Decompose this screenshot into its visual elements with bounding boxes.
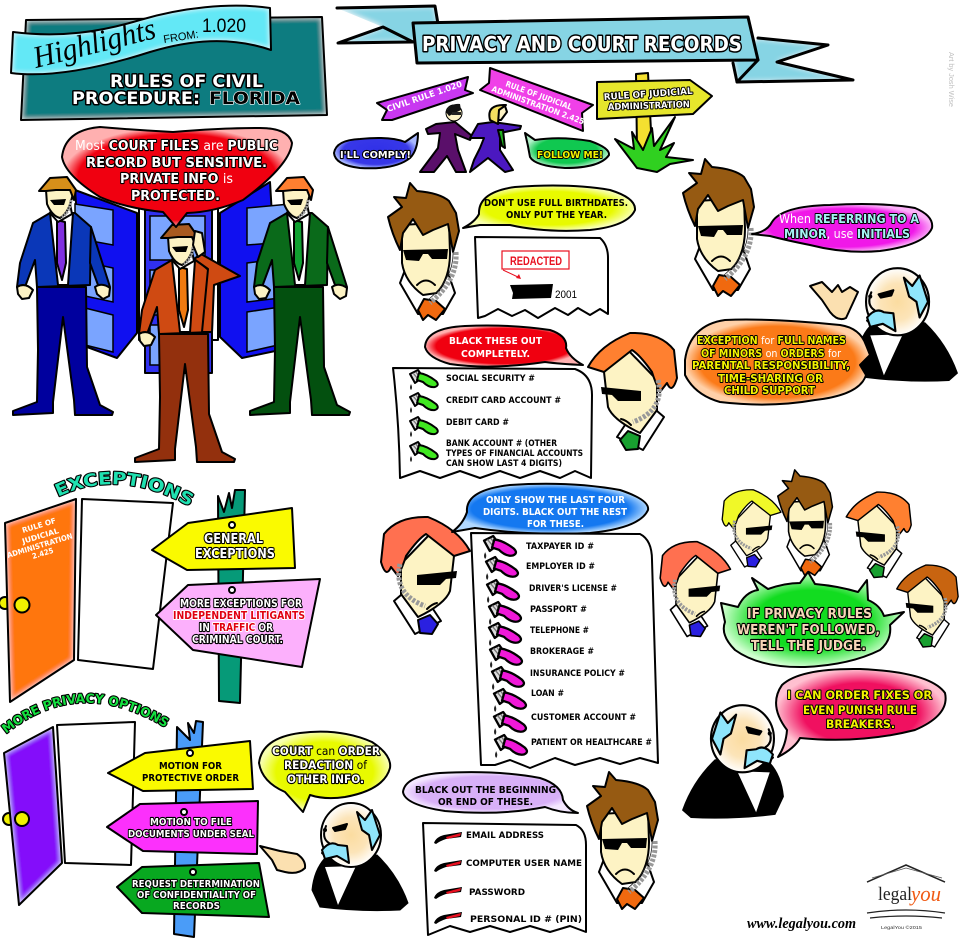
list items: TAXPAYER ID # bbox=[526, 542, 594, 552]
list items: EMAIL ADDRESS bbox=[466, 831, 544, 841]
bubble: exception for full names: CHILD SUPPORT bbox=[724, 384, 815, 397]
judge: right side facing right bbox=[683, 705, 783, 818]
bubble: when referring to a minor: When REFERRING TO A bbox=[779, 211, 919, 226]
bubble: only show the last four: FOR THESE. bbox=[527, 519, 584, 530]
teal header panel bbox=[21, 17, 327, 120]
logo: legalyou: you bbox=[909, 881, 941, 906]
sign: more exceptions bbox=[156, 579, 320, 667]
bubble: black out beginning or end bbox=[403, 772, 578, 813]
sign: more exceptions: CRIMINAL COURT. bbox=[192, 634, 283, 646]
bubble: i can order fixes: I CAN ORDER FIXES OR bbox=[787, 688, 932, 702]
bubble: i can order fixes: EVEN PUNISH RULE bbox=[803, 703, 917, 717]
bubble: court files are public: Most COURT FILES are PUBLIC bbox=[75, 138, 278, 154]
figure: agent in blue suit bbox=[13, 177, 113, 415]
bubble: follow me bbox=[525, 133, 609, 168]
bubble: exception for full names: OF MINORS on ORDERS for bbox=[701, 347, 841, 360]
bubble: if privacy rules weren't followed: WEREN'T FOLLOWED, bbox=[737, 623, 880, 638]
bubble: i can order fixes: BREAKERS. bbox=[826, 717, 895, 731]
sign: request determination: OF CONFIDENTIALITY OF bbox=[137, 890, 256, 901]
list items: PATIENT OR HEALTHCARE # bbox=[531, 738, 652, 748]
sign: motion for protective order: PROTECTIVE ORDER bbox=[142, 773, 239, 784]
bubble: if privacy rules weren't followed bbox=[721, 572, 904, 667]
bubble: don't use full birthdates: ONLY PUT THE YEAR. bbox=[506, 210, 607, 221]
website url: www.legalyou.com bbox=[747, 916, 856, 932]
signpost post bbox=[218, 490, 245, 703]
icon: orange door bbox=[0, 499, 76, 702]
redacted stamp: REDACTED bbox=[510, 254, 562, 268]
bubble: when referring to a minor bbox=[752, 204, 932, 252]
agent head: last four digits speaker bbox=[381, 517, 470, 634]
bubble: when referring to a minor: MINOR, use INITIALS bbox=[784, 226, 910, 241]
judge: shrugging bbox=[810, 268, 957, 381]
bubble: if privacy rules weren't followed: IF PRIVACY RULES bbox=[747, 607, 872, 622]
icon: black markers bbox=[434, 832, 462, 924]
ribbon: rule of judicial administration 2.425: ADMINISTRATION 2.425 bbox=[490, 84, 586, 127]
list items: SOCIAL SECURITY # bbox=[446, 374, 535, 384]
icon: orange door: ADMINISTRATION bbox=[6, 531, 74, 560]
signpost: rule of judicial administration bbox=[597, 73, 712, 172]
bubble: exception for full names: TIME-SHARING OR bbox=[718, 372, 823, 385]
bubble: follow me: FOLLOW ME! bbox=[537, 150, 603, 161]
figure: running woman bbox=[470, 105, 521, 172]
highlights ribbon bbox=[11, 6, 271, 74]
bubble: court can order redaction: OTHER INFO. bbox=[287, 772, 364, 786]
panel: black out list bbox=[393, 368, 592, 478]
artist credit: Art by Josh Wise bbox=[947, 52, 956, 107]
panel: beginning or end list bbox=[423, 823, 586, 935]
bubble: court files are public: PROTECTED. bbox=[131, 188, 220, 204]
list items: DRIVER'S LICENSE # bbox=[529, 584, 617, 594]
icon: orange door: JUDICIAL bbox=[20, 526, 60, 546]
panel: redacted document bbox=[475, 237, 608, 318]
year: 2001 bbox=[555, 289, 577, 301]
bubble: black these out completely: COMPLETELY. bbox=[461, 349, 530, 360]
signpost: rule of judicial administration: ADMINISTRATION bbox=[608, 100, 690, 113]
sign: general exceptions: GENERAL bbox=[204, 532, 263, 547]
agent head: minors speaker bbox=[683, 159, 754, 296]
rule number: 1.020 bbox=[202, 16, 246, 37]
list items: COMPUTER USER NAME bbox=[466, 859, 582, 869]
ribbon: rule of judicial administration 2.425 bbox=[480, 68, 593, 131]
icon: purple door bbox=[3, 727, 62, 905]
list items: TELEPHONE # bbox=[530, 626, 589, 636]
icon: open hand bbox=[810, 282, 858, 319]
bubble: exception for full names: EXCEPTION for FULL NAMES bbox=[697, 334, 846, 347]
sign: motion to file under seal: MOTION TO FILE bbox=[150, 817, 232, 828]
bubble: exception for full names bbox=[685, 320, 870, 405]
sign: general exceptions bbox=[152, 508, 295, 570]
heading: more privacy options: MORE PRIVACY OPTIONS bbox=[0, 692, 170, 734]
figure: agent in green suit bbox=[250, 177, 350, 415]
agent head: beginning or end speaker bbox=[587, 772, 658, 909]
bubble: only show the last four: ONLY SHOW THE LAST FOUR bbox=[486, 495, 625, 506]
list items: TYPES OF FINANCIAL ACCOUNTS bbox=[446, 449, 583, 459]
bubble: black these out completely bbox=[425, 326, 583, 367]
bubble: black out beginning or end: BLACK OUT THE BEGINNING bbox=[415, 785, 556, 796]
group of agents bbox=[660, 470, 958, 647]
panel: last four digits list bbox=[471, 533, 658, 768]
header subtitle: FLORIDA bbox=[209, 89, 301, 109]
panel: top-left agents and file cabinets bbox=[13, 127, 350, 462]
sign: general exceptions: EXCEPTIONS bbox=[195, 547, 275, 562]
logo: legalyou bbox=[867, 865, 945, 930]
bubble: don't use full birthdates: DON'T USE FULL BIRTHDATES. bbox=[484, 198, 628, 209]
signpost: rule of judicial administration: RULE OF JUDICIAL bbox=[604, 87, 693, 103]
arc guide: exceptions bbox=[58, 484, 196, 510]
bubble: i'll comply: I'LL COMPLY! bbox=[340, 150, 411, 161]
sign: more exceptions: IN TRAFFIC OR bbox=[199, 622, 273, 634]
bubble: if privacy rules weren't followed: TELL THE JUDGE. bbox=[751, 639, 866, 654]
bubble: exception for full names: PARENTAL RESPONSIBILITY, bbox=[692, 359, 850, 372]
icon: green paint brushes bbox=[410, 370, 438, 462]
blacked out month and day bbox=[510, 284, 553, 299]
logo: legalyou: legal bbox=[878, 884, 912, 905]
sign: request determination: RECORDS bbox=[173, 901, 220, 912]
agent head: birthdates speaker bbox=[388, 183, 459, 320]
bubble: black out beginning or end: OR END OF THESE. bbox=[438, 797, 533, 808]
sign: motion to file under seal bbox=[107, 801, 258, 854]
bubble: only show the last four: DIGITS. BLACK OUT THE REST bbox=[483, 507, 627, 518]
icon: magenta paint brushes bbox=[484, 536, 527, 758]
list items: EMPLOYER ID # bbox=[526, 562, 595, 572]
header subtitle: RULES OF CIVIL bbox=[110, 72, 263, 92]
title banner: privacy and court records bbox=[337, 6, 853, 82]
bubble: court can order redaction: REDACTION of bbox=[284, 758, 368, 772]
list items bbox=[526, 542, 652, 748]
bubble: black these out completely: BLACK THESE OUT bbox=[449, 336, 542, 347]
bubble: court can order redaction bbox=[259, 732, 390, 812]
open doorway bbox=[57, 722, 135, 865]
from label: FROM: bbox=[163, 29, 199, 46]
sign: motion for protective order: MOTION FOR bbox=[159, 761, 222, 772]
bubble: court files are public: PRIVATE INFO is bbox=[120, 171, 233, 187]
agent head: black these out speaker bbox=[588, 333, 677, 450]
ribbon: rule of judicial administration 2.425: RULE OF JUDICIAL bbox=[504, 79, 573, 112]
icon: file cabinet doors bbox=[75, 182, 290, 373]
list items: INSURANCE POLICY # bbox=[530, 669, 625, 679]
list items: PASSPORT # bbox=[530, 605, 587, 615]
sign: motion to file under seal: DOCUMENTS UNDER SEAL bbox=[128, 829, 255, 840]
bubble: don't use full birthdates bbox=[463, 186, 635, 231]
bubble: court files are public bbox=[62, 127, 292, 227]
heading: exceptions: EXCEPTIONS bbox=[54, 470, 194, 506]
bubble: only show the last four bbox=[452, 484, 648, 534]
list items: PASSWORD bbox=[469, 888, 525, 898]
list items bbox=[446, 374, 583, 469]
list items: PERSONAL ID # (PIN) bbox=[470, 915, 582, 925]
icon: pointing hand bbox=[260, 846, 305, 873]
bubble: i can order fixes bbox=[776, 669, 946, 757]
icon: orange door: 2.425 bbox=[31, 546, 55, 561]
sign: request determination bbox=[117, 863, 269, 917]
figure: walking man bbox=[420, 104, 472, 172]
bubble: i'll comply bbox=[334, 133, 418, 168]
list items: CAN SHOW LAST 4 DIGITS) bbox=[446, 459, 562, 469]
header subtitle bbox=[72, 72, 301, 109]
bubble: court files are public: RECORD BUT SENSITIVE. bbox=[86, 155, 267, 171]
panel: more privacy options bbox=[0, 692, 270, 938]
icon: grass bbox=[615, 117, 693, 172]
arc guide: more privacy options bbox=[6, 703, 174, 734]
icon: orange door: RULE OF bbox=[21, 516, 57, 535]
sign: request determination: REQUEST DETERMINATION bbox=[132, 879, 260, 890]
list items: BANK ACCOUNT # (OTHER bbox=[446, 439, 557, 449]
signpost post bbox=[174, 721, 203, 937]
list items: LOAN # bbox=[531, 689, 564, 699]
list items: BROKERAGE # bbox=[530, 647, 594, 657]
list items: DEBIT CARD # bbox=[446, 418, 509, 428]
open doorway bbox=[78, 499, 173, 669]
judge: pointing bbox=[260, 803, 408, 911]
list items bbox=[466, 831, 582, 925]
figure: agent in red suit bbox=[135, 224, 240, 462]
sign: more exceptions: INDEPENDENT LITIGANTS bbox=[173, 610, 305, 622]
logo: legalyou: LegalYou ©2015 bbox=[881, 924, 923, 930]
sign: more exceptions: MORE EXCEPTIONS FOR bbox=[180, 598, 302, 610]
sign: motion for protective order bbox=[108, 741, 253, 791]
list items: CREDIT CARD ACCOUNT # bbox=[446, 396, 561, 406]
script heading: Highlights bbox=[28, 11, 159, 75]
panel: highlights header bbox=[11, 6, 327, 120]
title banner: privacy and court records: PRIVACY AND COURT RECORDS bbox=[422, 32, 742, 56]
list items: CUSTOMER ACCOUNT # bbox=[531, 713, 636, 723]
panel: exceptions section bbox=[0, 470, 321, 704]
bubble: court can order redaction: COURT can ORDER bbox=[272, 744, 380, 758]
ribbon: civil rule 1.020: CIVIL RULE 1.020 bbox=[386, 80, 464, 115]
header subtitle: PROCEDURE: bbox=[72, 89, 200, 109]
